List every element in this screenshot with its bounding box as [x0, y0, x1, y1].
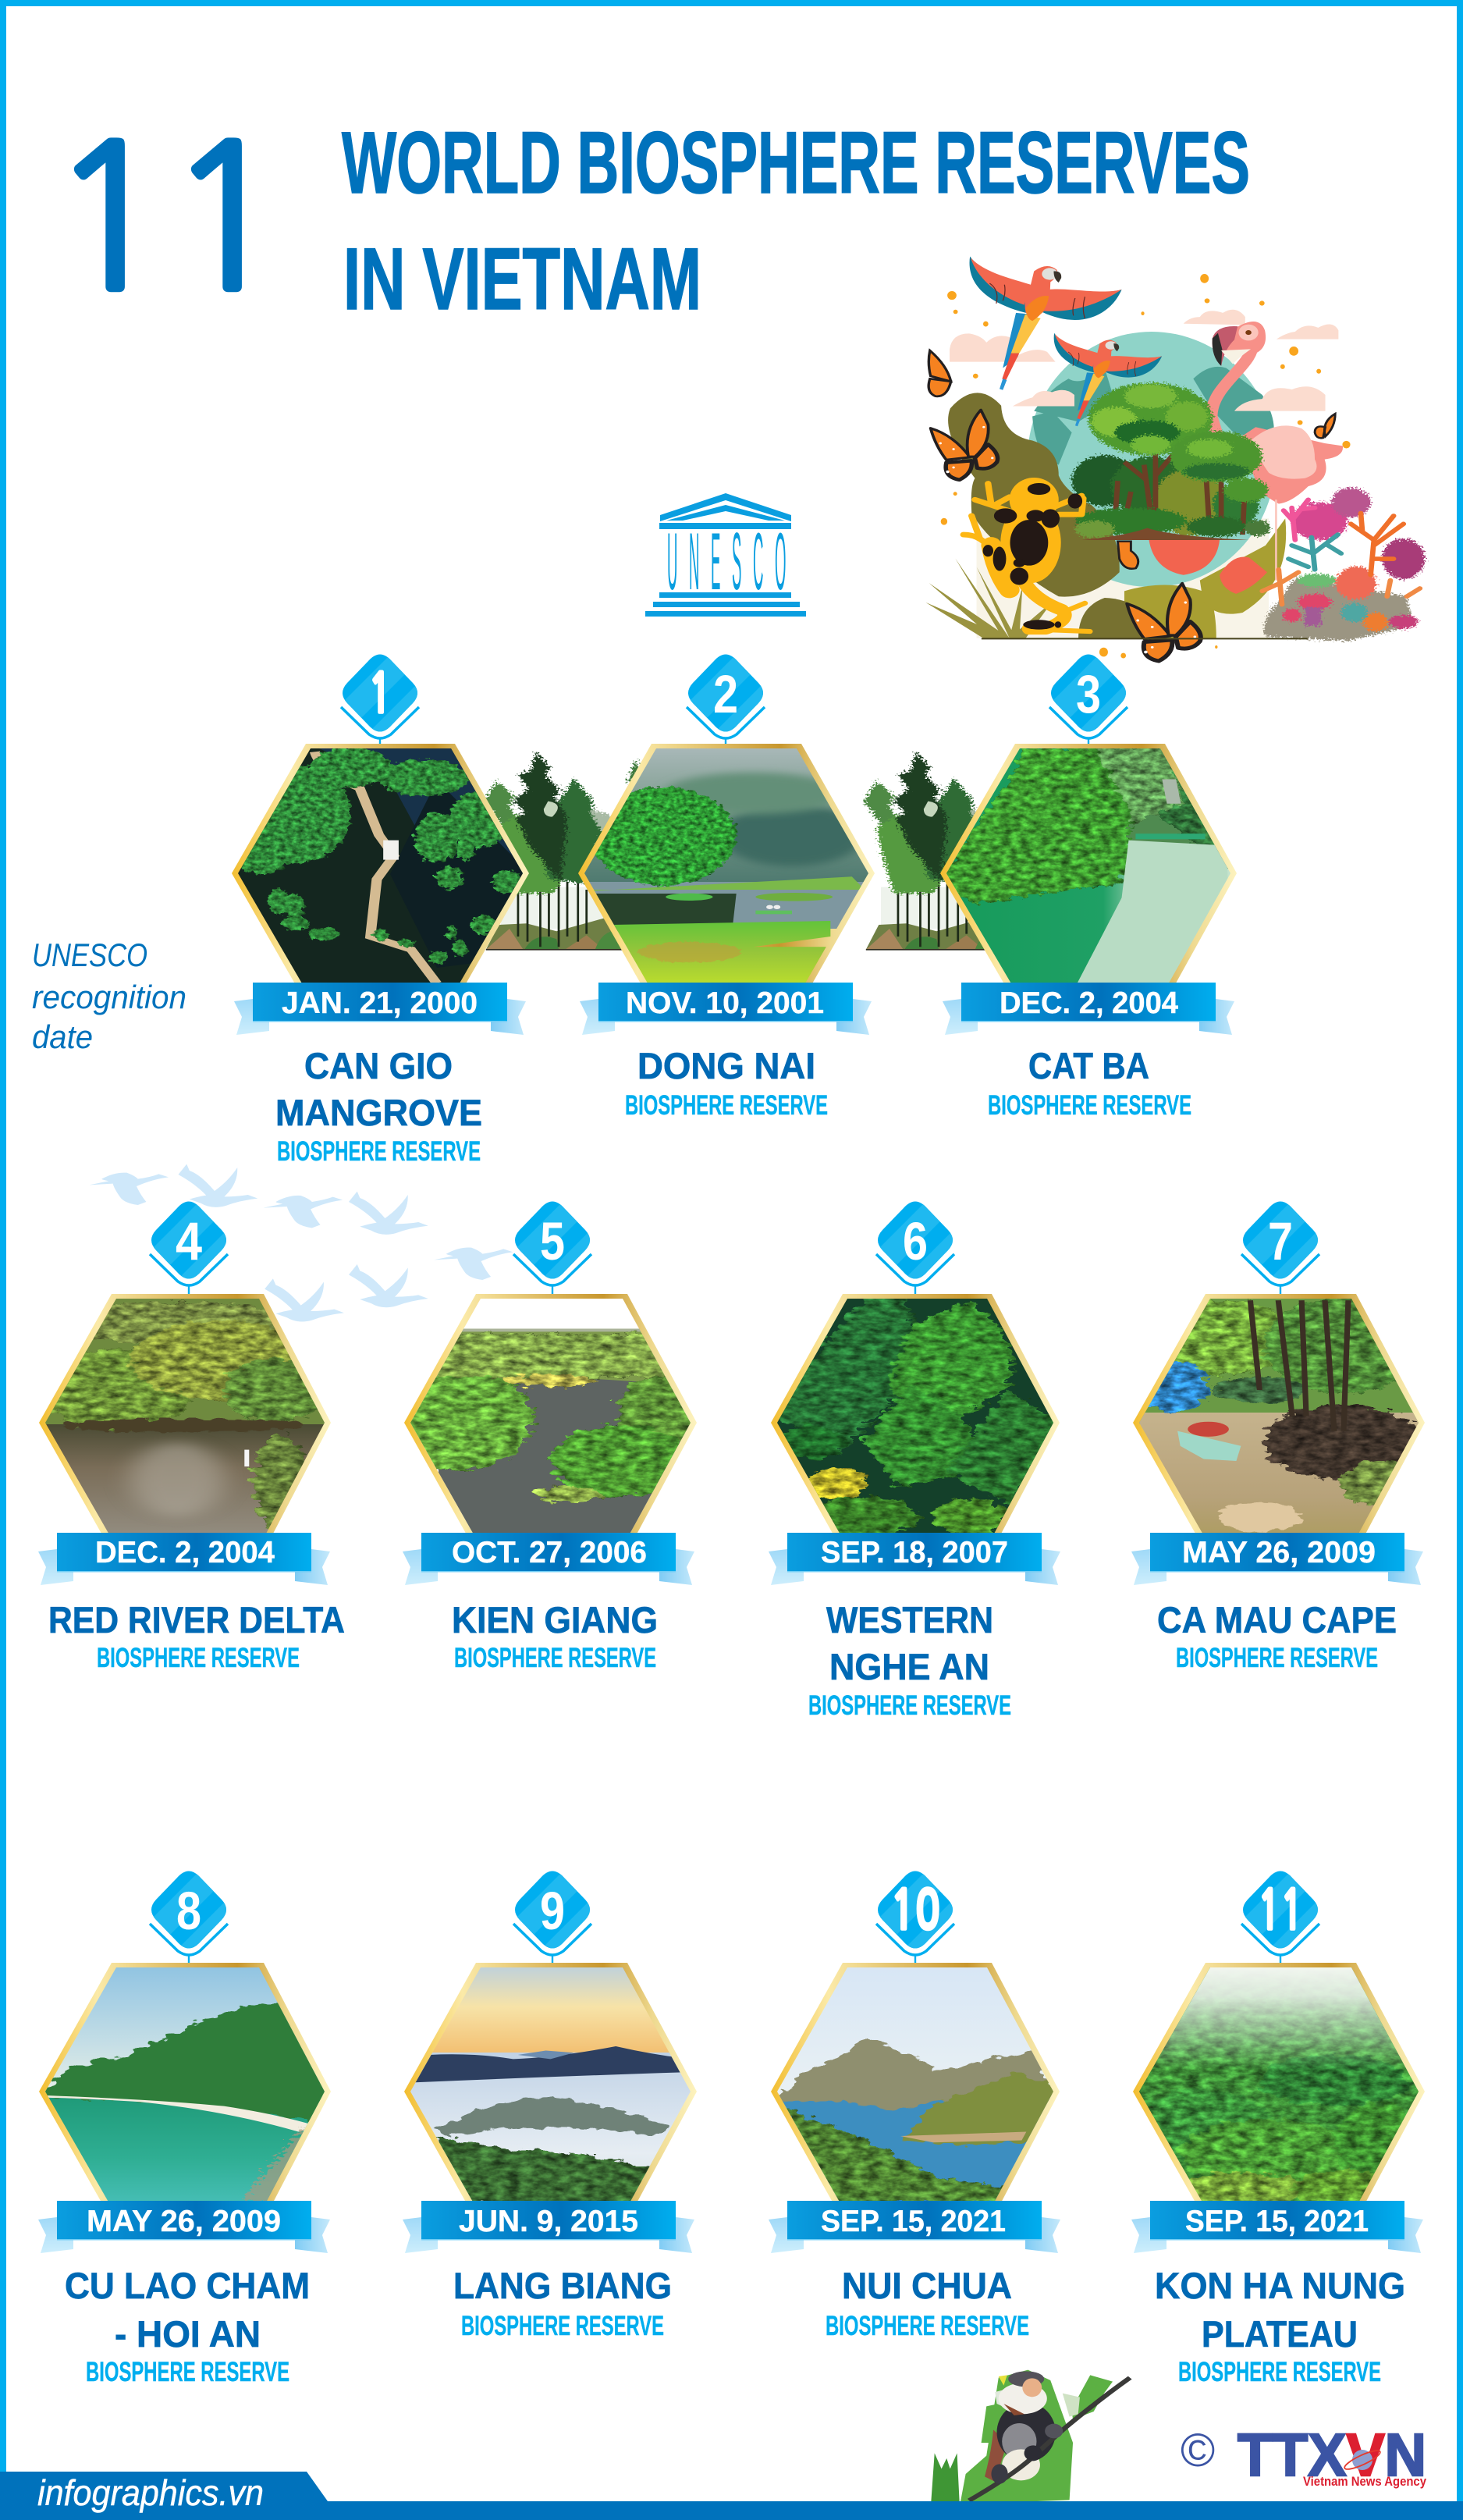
reserve 1: Can Gio Mangrove: [232, 646, 531, 1167]
number badge 1: [333, 646, 431, 747]
big number 11: [48, 118, 286, 318]
hexagon photo 2: [578, 744, 875, 1003]
name 5: BIOSPHERE RESERVE: [454, 1643, 656, 1673]
name 6: NGHE AN: [829, 1646, 989, 1687]
date ribbon 5: [403, 1533, 694, 1585]
date ribbon 7: MAY 26, 2009: [1182, 1536, 1376, 1569]
name 1: MANGROVE: [275, 1092, 482, 1133]
date ribbon 2: [580, 983, 872, 1035]
reserve 2: Dong Nai: [578, 646, 875, 1121]
hexagon photo 3: [940, 744, 1237, 983]
side note: UNESCO recognition date: UNESCO: [32, 937, 147, 973]
date ribbon 4: [38, 1533, 330, 1585]
name 1: CAN GIO: [304, 1045, 453, 1086]
number badge 10: [868, 1863, 967, 1964]
logo: TTXVN: Vietnam News Agency: [1303, 2474, 1426, 2489]
number badge 5: 5: [540, 1211, 565, 1271]
name 9: LANG BIANG: [453, 2265, 672, 2306]
name 8: - HOI AN: [115, 2313, 261, 2355]
date ribbon 6: SEP. 18, 2007: [821, 1536, 1008, 1569]
name 7: CA MAU CAPE: [1157, 1599, 1397, 1640]
hexagon photo 7: [1133, 1294, 1425, 1553]
name 6: BIOSPHERE RESERVE: [808, 1690, 1011, 1721]
name 1: BIOSPHERE RESERVE: [277, 1136, 481, 1167]
orange dots: [941, 274, 1351, 658]
date ribbon 7: [1131, 1533, 1423, 1585]
butterflies: [929, 350, 1335, 661]
side note: UNESCO recognition date: date: [32, 1018, 93, 1055]
reserve 6: Western Nghe An: [769, 1193, 1064, 1721]
name 2: BIOSPHERE RESERVE: [625, 1090, 828, 1121]
UNESCO logo: [645, 493, 806, 617]
spiky plant: [925, 558, 1052, 638]
number badge 2: 2: [713, 664, 738, 724]
forest strip between reserves 1 and 2: [484, 752, 641, 951]
number badge 3: [1042, 646, 1140, 747]
logo: TTXVN: TTXVN: [1238, 2422, 1426, 2489]
name 10: [826, 2265, 1029, 2341]
icon: douc langur monkey on branch: [931, 2370, 1130, 2502]
title: IN VIETNAM: [343, 230, 701, 328]
title: [342, 114, 1250, 328]
frog: [964, 478, 1090, 631]
name 3: [988, 1045, 1191, 1121]
footer bar: infographics.vn: [37, 2472, 264, 2513]
hexagon photo 5: [404, 1294, 697, 1533]
hexagon photo 4: [39, 1294, 331, 1551]
name 6: [808, 1599, 1011, 1721]
number badge 11: 11: [1258, 1885, 1303, 1938]
number badge 8: 8: [176, 1881, 201, 1941]
leaf: olive: [948, 393, 1120, 597]
name 9: [453, 2265, 672, 2341]
footer bar: [0, 2472, 1463, 2520]
date ribbon 9: [403, 2201, 694, 2253]
hexagon photo 10: [771, 1963, 1064, 2220]
date ribbon 8: [38, 2201, 330, 2253]
name 4: RED RIVER DELTA: [48, 1599, 345, 1640]
date ribbon 2: NOV. 10, 2001: [626, 986, 824, 1020]
lower leaves: [1124, 518, 1286, 638]
reserve 8: Cu Lao Cham - Hoi An: [38, 1863, 336, 2387]
copyright mark: ©: [1181, 2424, 1215, 2476]
date ribbon 8: MAY 26, 2009: [87, 2205, 281, 2238]
big number 11: 1: [165, 118, 286, 318]
number badge 10: 10: [890, 1885, 940, 1938]
name 11: KON HA NUNG: [1155, 2265, 1405, 2306]
name 5: KIEN GIANG: [452, 1599, 658, 1640]
name 4: [48, 1599, 345, 1673]
flamingo: [1211, 322, 1343, 581]
name 3: CAT BA: [1028, 1045, 1149, 1086]
reserve 4: Red River Delta: [38, 1193, 345, 1673]
date ribbon 11: [1131, 2201, 1423, 2253]
name 9: BIOSPHERE RESERVE: [461, 2311, 664, 2341]
date ribbon 10: [769, 2201, 1060, 2253]
number badge 9: 9: [540, 1881, 565, 1941]
UNESCO logo: UNESCO: [667, 517, 787, 606]
date ribbon 3: DEC. 2, 2004: [1000, 986, 1178, 1020]
date ribbon 5: OCT. 27, 2006: [452, 1536, 647, 1569]
hexagon photo 9: [404, 1963, 697, 2220]
date ribbon 3: [943, 983, 1234, 1035]
number badge 7: 7: [1268, 1211, 1293, 1271]
name 3: BIOSPHERE RESERVE: [988, 1090, 1191, 1121]
reserve 5: Kien Giang: [403, 1202, 697, 1667]
date ribbon 10: SEP. 15, 2021: [821, 2205, 1006, 2238]
name 8: BIOSPHERE RESERVE: [86, 2357, 289, 2387]
hexagon photo 6: [771, 1294, 1064, 1553]
reserve 9: Lang Biang: [403, 1863, 697, 2341]
parrot small: [1054, 333, 1162, 426]
name 11: PLATEAU: [1202, 2313, 1358, 2355]
side note: UNESCO recognition date: [32, 937, 186, 1055]
number badge 11: [1234, 1863, 1332, 1964]
date ribbon 6: [769, 1533, 1060, 1585]
anthurium flowers: [1149, 540, 1267, 594]
reserve 3: Cat Ba: [933, 646, 1240, 1121]
hexagon photo 1: [232, 744, 531, 1003]
date ribbon 9: JUN. 9, 2015: [459, 2205, 638, 2238]
name 11: [1155, 2265, 1405, 2387]
name 7: [1157, 1599, 1397, 1673]
number badge 7: [1234, 1193, 1332, 1294]
number badge 8: [142, 1863, 240, 1964]
date ribbon 1: [234, 983, 526, 1035]
name 4: BIOSPHERE RESERVE: [97, 1643, 300, 1673]
date ribbon 11: SEP. 15, 2021: [1185, 2205, 1369, 2238]
name 8: CU LAO CHAM: [65, 2265, 310, 2306]
date ribbon 1: JAN. 21, 2000: [282, 986, 478, 1020]
name 2: [625, 1045, 828, 1121]
number badge 5: [506, 1193, 604, 1294]
number badge 9: [506, 1863, 604, 1964]
parrot large: [970, 257, 1122, 390]
name 5: [452, 1599, 658, 1673]
number badge 4: [142, 1193, 240, 1294]
name 10: BIOSPHERE RESERVE: [826, 2311, 1029, 2341]
reserve 10: Nui Chua: [769, 1863, 1064, 2341]
big number 11: 1: [48, 118, 169, 318]
hexagon photo 11: [1120, 1960, 1437, 2222]
cream ground: [977, 518, 1269, 638]
name 8: [65, 2265, 310, 2387]
number badge 1: 1: [368, 668, 392, 721]
illustration: biodiversity collage: [925, 257, 1425, 661]
number badge 2: [679, 646, 777, 747]
tree group: [1072, 382, 1270, 540]
side note: UNESCO recognition date: recognition: [32, 979, 186, 1015]
name 6: WESTERN: [826, 1599, 993, 1640]
reserve 7: Ca Mau Cape: [1131, 1193, 1425, 1673]
reserve 11: Kon Ha Nung Plateau: [1120, 1863, 1437, 2387]
name 2: DONG NAI: [637, 1045, 815, 1086]
number badge 3: 3: [1076, 664, 1101, 724]
number badge 6: 6: [903, 1211, 928, 1271]
coral reef: [1262, 488, 1425, 641]
ground line: [982, 638, 1308, 639]
number badge 6: [868, 1193, 967, 1294]
name 10: NUI CHUA: [842, 2265, 1012, 2306]
flock of birds: [89, 1164, 513, 1322]
forest strip between reserves 2 and 3: [864, 752, 1021, 951]
globe: [1028, 332, 1276, 587]
date ribbon 4: DEC. 2, 2004: [95, 1536, 275, 1569]
number badge 4: 4: [176, 1211, 202, 1271]
hexagon photo 8: [39, 1963, 336, 2220]
name 1: [275, 1045, 482, 1167]
clouds: [950, 310, 1338, 411]
